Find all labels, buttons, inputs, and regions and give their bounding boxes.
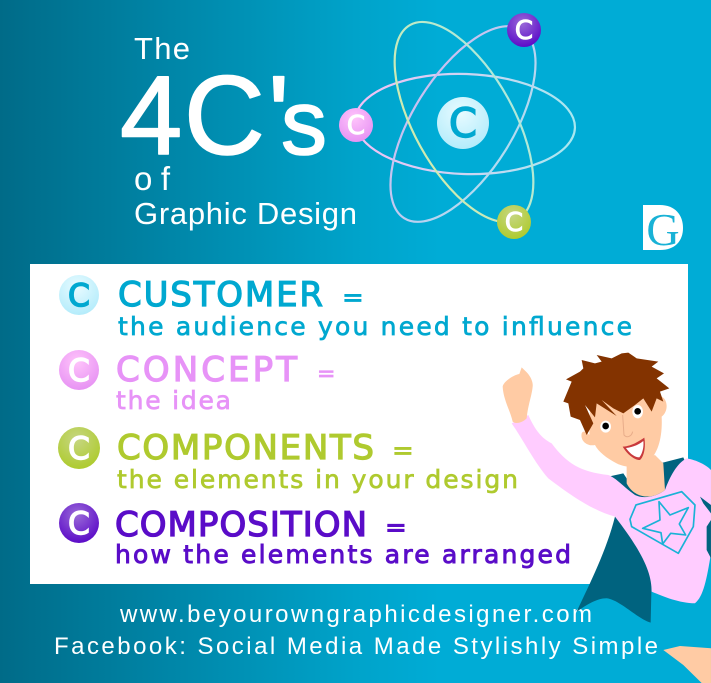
pink ball — [339, 108, 373, 142]
pink ball: C — [347, 111, 365, 141]
item: components: the elements in your design — [117, 465, 518, 494]
footer text: www.beyourowngraphicdesigner.com — [119, 601, 592, 628]
face — [581, 390, 667, 467]
item: composition: how the elements are arranged — [115, 540, 571, 569]
item: composition: = — [385, 513, 407, 543]
white panel — [30, 264, 688, 584]
item: concept — [59, 350, 335, 415]
item: concept: CONCEPT — [116, 350, 297, 390]
green ball — [497, 205, 531, 239]
cape — [577, 457, 711, 623]
title: s — [281, 72, 327, 174]
item: composition: COMPOSITION — [115, 505, 367, 545]
neck — [627, 455, 665, 497]
centre ball — [437, 97, 489, 149]
title: The — [134, 31, 190, 66]
orbit: falling — [366, 1, 562, 243]
title — [120, 31, 357, 231]
item: customer: C — [68, 278, 90, 314]
body and arm — [512, 415, 711, 603]
footer text: Facebook: Social Media Made Stylishly Simple — [54, 633, 658, 660]
atom diagram — [339, 1, 577, 245]
item: customer: = — [342, 283, 364, 313]
orbit: horizontal — [353, 70, 577, 178]
item: composition — [59, 503, 571, 569]
green ball: C — [505, 208, 523, 238]
title: 4C' — [120, 53, 289, 178]
raised fist — [503, 367, 533, 423]
item: customer: the audience you need to influence — [118, 312, 632, 341]
nose — [623, 415, 633, 437]
item: customer — [59, 275, 632, 341]
item: components: COMPONENTS — [117, 428, 374, 468]
eyes — [600, 405, 643, 433]
chest emblem — [630, 492, 695, 553]
orbit: rising — [362, 3, 564, 245]
item: concept: the idea — [116, 386, 231, 415]
mouth — [623, 438, 645, 460]
hair — [563, 353, 669, 435]
purple ball — [507, 13, 541, 47]
lower hand — [663, 646, 711, 683]
logo: G — [646, 204, 680, 255]
footer text — [54, 601, 658, 660]
item: components: C — [68, 431, 90, 467]
item: composition: C — [68, 506, 90, 542]
cape strip on shoulder — [700, 497, 711, 558]
item: customer: CUSTOMER — [118, 275, 323, 315]
item: components — [58, 427, 518, 494]
purple ball: C — [515, 16, 533, 46]
item: concept: = — [317, 362, 335, 387]
item: concept: C — [68, 353, 90, 389]
superhero character — [503, 353, 711, 683]
title: Graphic Design — [134, 196, 357, 231]
item: components: = — [392, 436, 414, 466]
centre ball: C — [449, 101, 477, 147]
title: of — [134, 160, 171, 197]
